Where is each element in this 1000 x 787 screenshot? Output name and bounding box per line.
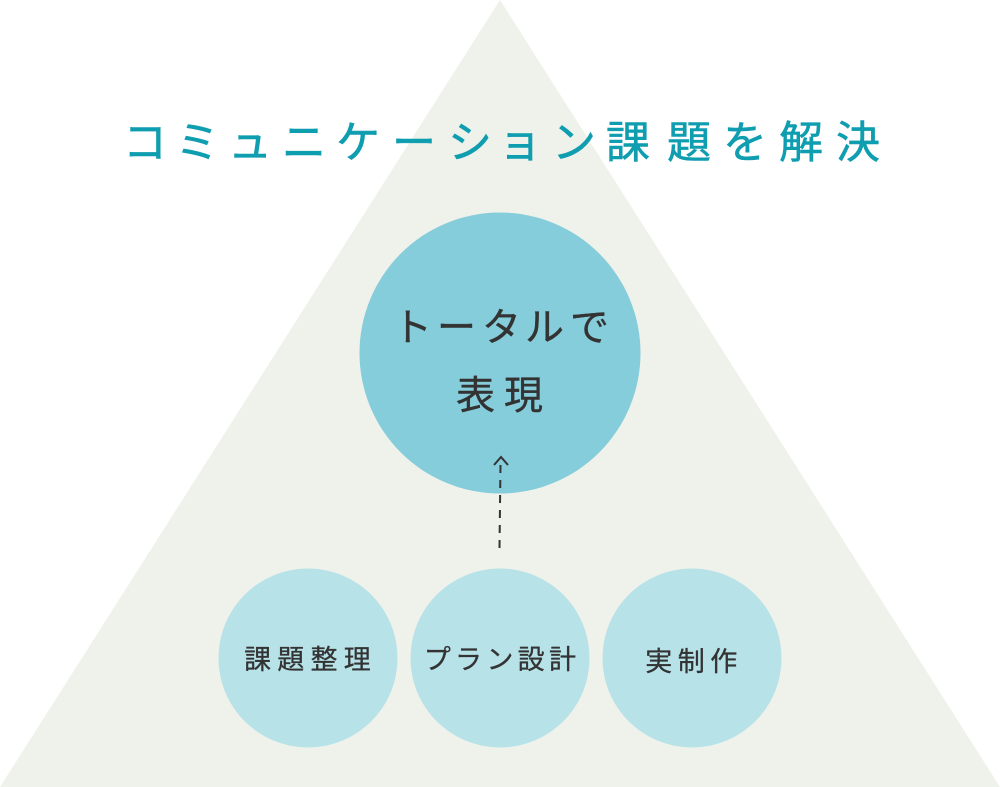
circle: production — [602, 568, 782, 748]
circle: issue organization — [218, 568, 398, 748]
top circle: total expression: トータルで — [393, 307, 609, 350]
top circle: total expression: 表現 — [456, 375, 543, 418]
circle: production: 実制作 — [645, 647, 743, 677]
top circle: total expression — [360, 212, 640, 494]
dashed arrow — [494, 457, 508, 548]
circle: plan design — [410, 568, 590, 748]
title: コミュニケーション課題を解決 — [123, 118, 880, 168]
circle: plan design: プラン設計 — [424, 645, 580, 675]
circle: issue organization: 課題整理 — [244, 645, 377, 675]
